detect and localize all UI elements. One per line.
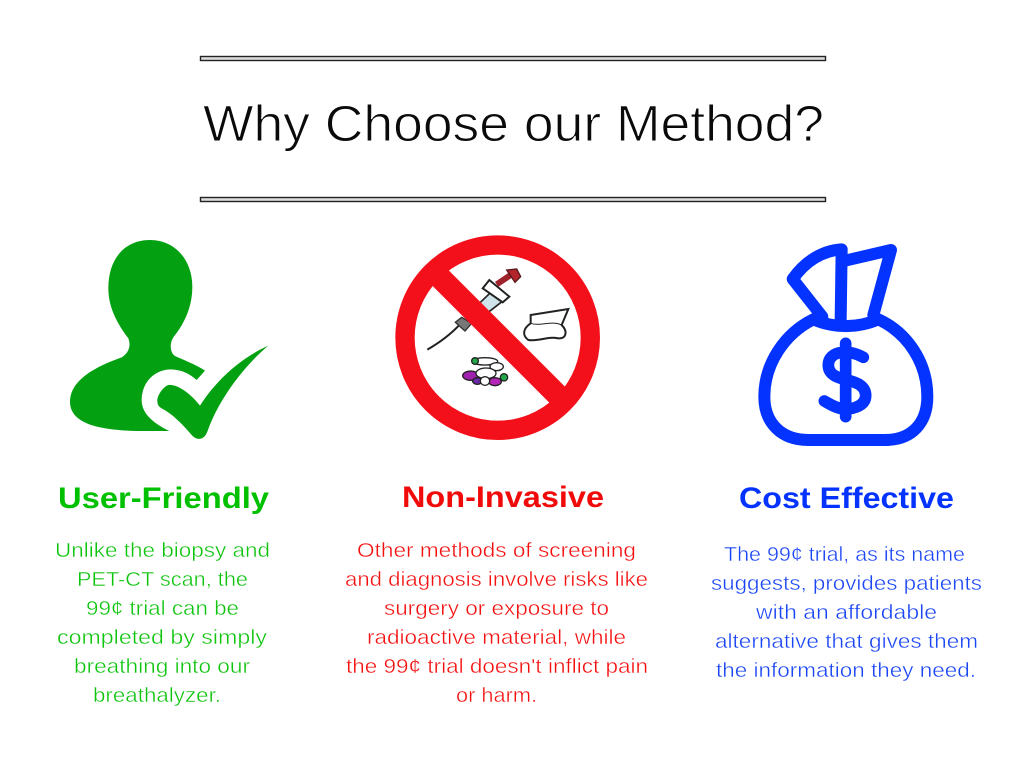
- body text: cost effective: with an affordable: [755, 601, 937, 624]
- body text: non-invasive: Other methods of screening: [357, 539, 636, 562]
- heading: cost effective: Cost Effective: [739, 482, 954, 515]
- heading: user-friendly: User-Friendly: [58, 482, 269, 515]
- title: Why Choose our Method?: [203, 95, 824, 152]
- body text: user-friendly: breathalyzer.: [93, 684, 221, 707]
- body text: cost effective: alternative that gives them: [715, 630, 978, 653]
- body text: cost effective: [711, 543, 982, 682]
- title block: [200, 56, 826, 202]
- body text: user-friendly: 99¢ trial can be: [86, 597, 239, 620]
- body text: non-invasive: [345, 539, 648, 707]
- pills: [463, 358, 508, 386]
- icon: no needles, drugs or powder: [405, 245, 590, 430]
- column: cost effective: [711, 482, 982, 682]
- column: non-invasive: [345, 481, 648, 707]
- powder bag: [524, 309, 568, 340]
- body text: cost effective: the information they need.: [716, 659, 976, 682]
- body text: non-invasive: the 99¢ trial doesn't inflict pain: [346, 655, 648, 678]
- icon: user with check mark: [70, 240, 268, 439]
- heading: non-invasive: Non-Invasive: [402, 481, 604, 514]
- body text: non-invasive: or harm.: [456, 684, 537, 707]
- icon: money bag: [764, 249, 927, 440]
- body text: cost effective: The 99¢ trial, as its name: [724, 543, 965, 566]
- body text: user-friendly: breathing into our: [74, 655, 250, 678]
- body text: cost effective: suggests, provides patients: [711, 572, 982, 595]
- syringe: [427, 269, 521, 350]
- body text: user-friendly: [55, 539, 270, 707]
- body text: user-friendly: PET-CT scan, the: [77, 568, 248, 591]
- body text: user-friendly: Unlike the biopsy and: [55, 539, 270, 562]
- body text: non-invasive: radioactive material, while: [367, 626, 626, 649]
- column: user-friendly: [55, 482, 270, 707]
- body text: non-invasive: surgery or exposure to: [384, 597, 609, 620]
- body text: user-friendly: completed by simply: [57, 626, 268, 649]
- body text: non-invasive: and diagnosis involve risks like: [345, 568, 648, 591]
